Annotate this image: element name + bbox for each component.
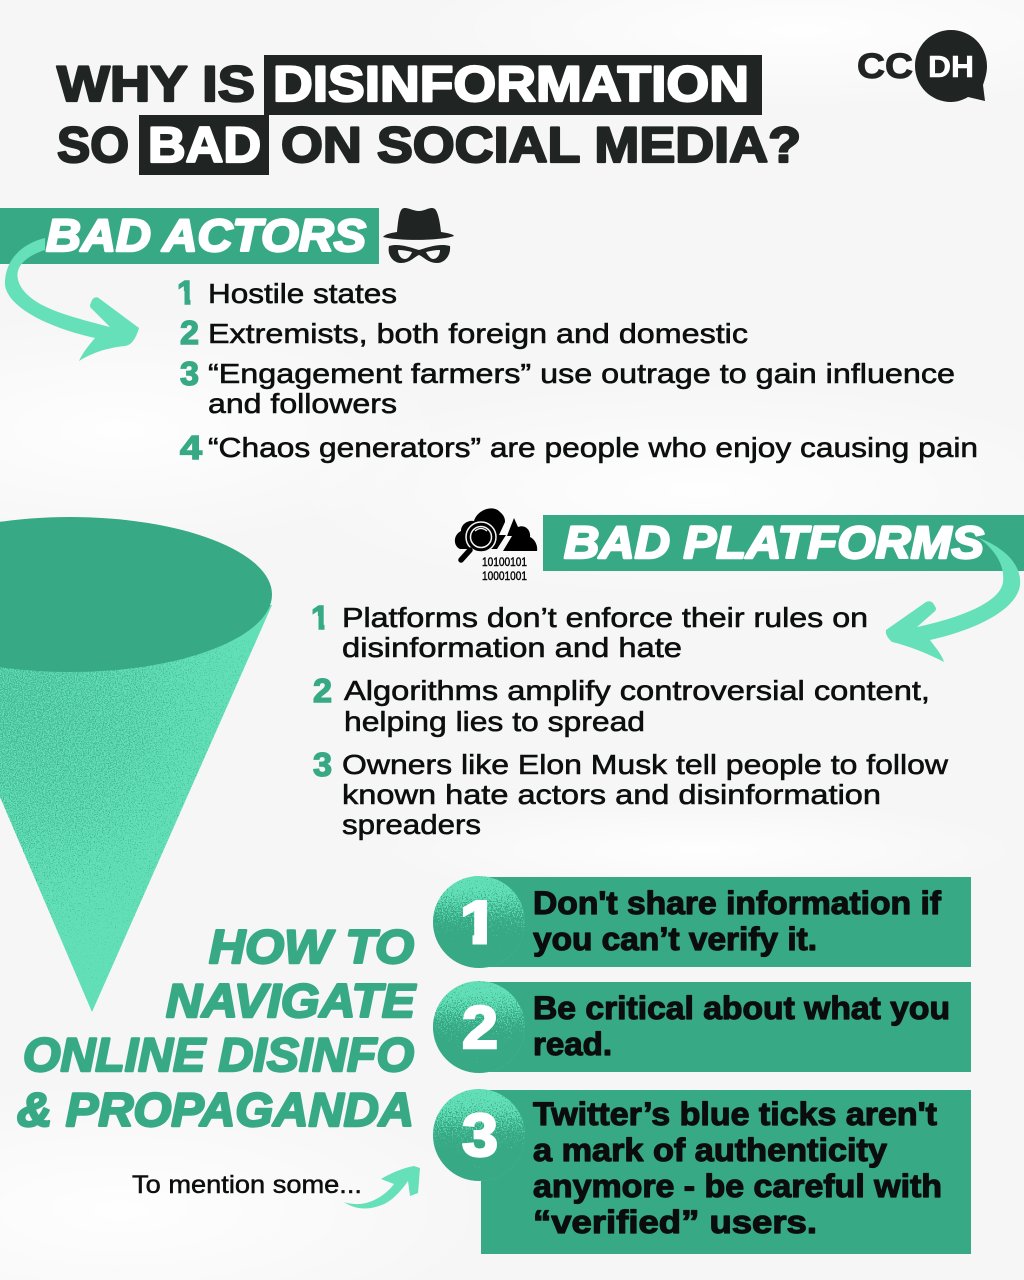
title highlight box: bad	[139, 115, 269, 175]
binary text: 10100101	[482, 555, 527, 569]
tip 2 panel	[479, 982, 971, 1072]
item 3: Owners like Elon Musk tell people to follow	[342, 749, 949, 780]
tip 1	[433, 876, 971, 968]
title line 2: on social media: ON SOCIAL MEDIA?	[281, 117, 801, 173]
icon: spy hat and mask	[383, 208, 454, 263]
logo: CCDH	[857, 30, 987, 102]
item 3	[313, 746, 949, 840]
logo letters DH: DH	[928, 49, 974, 84]
item 1: 1	[311, 599, 329, 636]
item 2: 2	[313, 672, 332, 709]
arrow: bad platforms to list	[886, 538, 1020, 662]
item 2: 2	[180, 314, 199, 351]
logo speech bubble	[915, 30, 987, 102]
funnel texture	[0, 640, 272, 1012]
tip 3 text: a mark of authenticity	[533, 1132, 887, 1168]
tip 2 text	[533, 990, 950, 1062]
tip 2 badge	[433, 981, 525, 1073]
tip 3 text	[533, 1096, 942, 1240]
item 3: 3	[313, 746, 332, 783]
icon: cloud, magnifier and binary: 10001001	[482, 569, 527, 583]
item 3: known hate actors and disinformation	[342, 779, 881, 810]
list: bad platforms	[311, 599, 949, 840]
item 4: 4	[180, 429, 203, 466]
item 1: Platforms don’t enforce their rules on	[342, 602, 868, 633]
item 1: Hostile states	[208, 278, 397, 309]
item 2	[313, 672, 930, 737]
title word: disinformation: DISINFORMATION	[273, 56, 749, 112]
icon: cloud, magnifier and binary	[455, 508, 537, 583]
heading: how to navigate: & PROPAGANDA	[17, 1083, 414, 1136]
tip 1 panel	[479, 877, 971, 967]
item 3: 3	[180, 355, 199, 392]
tip 1 text: Don't share information if	[533, 885, 941, 921]
note: to mention some: To mention some...	[132, 1171, 362, 1199]
tip 2 text: read.	[533, 1026, 612, 1062]
item 1: 1	[177, 274, 195, 311]
item 3: and followers	[208, 388, 397, 419]
heading text: BAD ACTORS	[46, 210, 366, 261]
tip 2	[433, 981, 971, 1073]
list: bad actors	[177, 274, 978, 466]
tip 3 panel	[481, 1090, 971, 1254]
item 3	[180, 355, 955, 419]
item 4: “Chaos generators” are people who enjoy causing pain	[208, 432, 978, 463]
heading: how to navigate: HOW TO	[209, 920, 414, 973]
tip 3 text: Twitter’s blue ticks aren't	[533, 1096, 937, 1132]
tip 2 badge: 2	[462, 994, 498, 1061]
panel: bad platforms heading	[543, 515, 1024, 571]
heading: how to navigate: NAVIGATE	[166, 974, 417, 1027]
heading: how to navigate	[17, 920, 417, 1136]
funnel top opening	[0, 517, 272, 672]
tip 3 badge: 3	[462, 1102, 498, 1169]
item 1: disinformation and hate	[342, 632, 682, 663]
tip 1 text: you can’t verify it.	[533, 921, 817, 957]
item 1	[178, 280, 396, 305]
title word: bad: BAD	[148, 117, 261, 173]
funnel body	[0, 605, 272, 1012]
item 3: “Engagement farmers” use outrage to gain influence	[208, 358, 955, 389]
tip 3 text: anymore - be careful with	[533, 1168, 942, 1204]
title line 2: so: SO	[57, 117, 129, 173]
tip 1 badge	[433, 876, 525, 968]
item 2: Algorithms amplify controversial content,	[344, 675, 930, 706]
item 2	[180, 314, 748, 351]
logo letters CC: CC	[857, 47, 913, 86]
panel: bad actors heading	[0, 208, 379, 264]
title highlight box: disinformation	[264, 55, 762, 115]
tip 1 badge: 1	[460, 889, 498, 956]
tip 2 text: Be critical about what you	[533, 990, 950, 1026]
heading band	[543, 515, 1024, 571]
tip 1 text	[533, 885, 941, 957]
arrow: note to tips	[344, 1166, 420, 1208]
tip 3	[433, 1089, 971, 1254]
item 2: helping lies to spread	[344, 706, 645, 737]
heading band	[0, 208, 379, 264]
item 2: Extremists, both foreign and domestic	[208, 318, 748, 349]
arrow: bad actors to list	[5, 238, 139, 361]
title line 1: why is: WHY IS	[57, 56, 255, 112]
funnel illustration	[0, 517, 272, 1012]
heading: how to navigate: ONLINE DISINFO	[23, 1028, 414, 1081]
cloud and magnifier	[455, 508, 537, 560]
item 3: spreaders	[342, 809, 481, 840]
tip 3 badge	[433, 1089, 525, 1181]
tip 3 text: “verified” users.	[533, 1204, 817, 1240]
item 1	[312, 605, 866, 658]
heading text: BAD PLATFORMS	[564, 517, 984, 568]
title	[57, 55, 801, 175]
